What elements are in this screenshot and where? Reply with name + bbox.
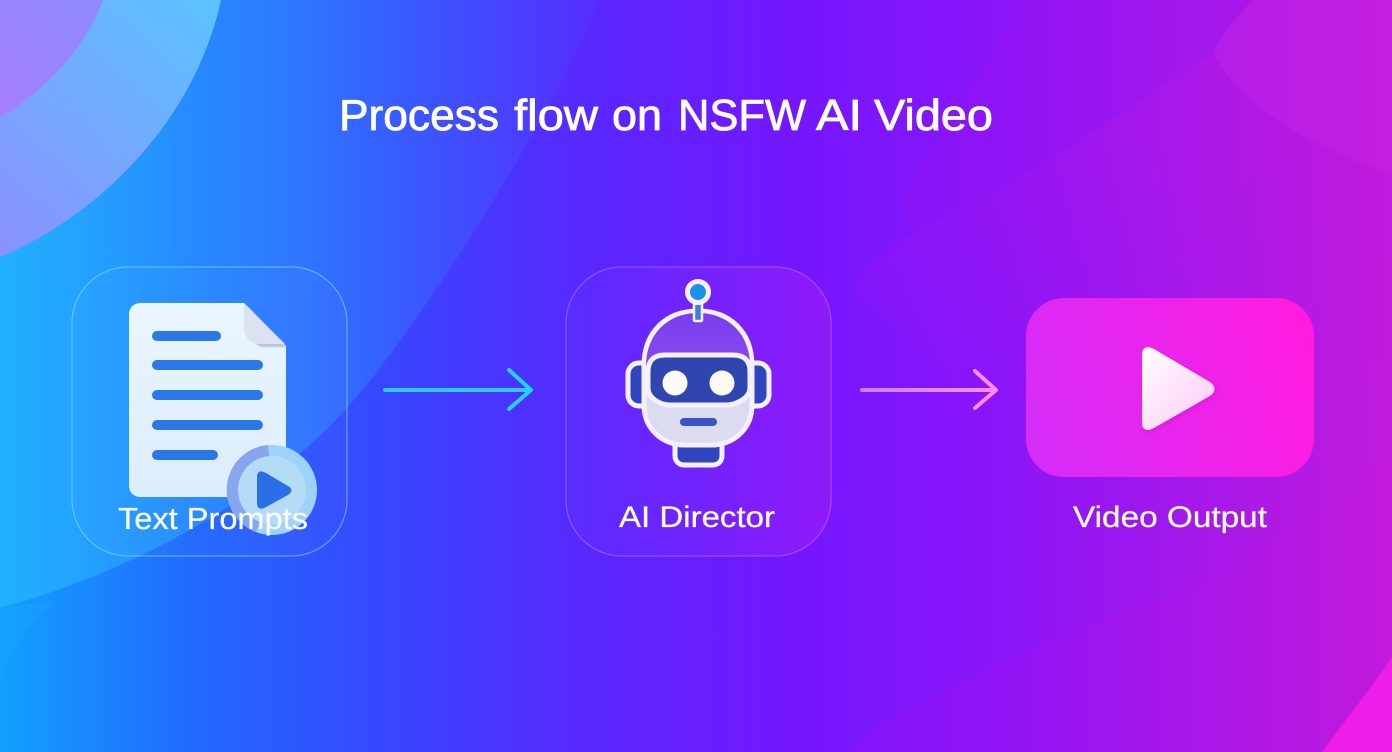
icon: play triangle — [1142, 347, 1216, 432]
title: flow — [514, 92, 599, 140]
panel: video output — [1026, 298, 1314, 534]
title: Process — [339, 92, 499, 140]
title: NSFW — [678, 92, 806, 140]
label: text prompts: Text Prompts — [118, 501, 308, 536]
title: AI — [816, 92, 862, 140]
icon: robot — [628, 282, 769, 465]
label: video output: Video Output — [1073, 501, 1268, 534]
icon: document — [129, 303, 286, 497]
icon: play badge — [227, 445, 317, 535]
arrow: prompts to director — [385, 370, 531, 409]
title: Video — [874, 92, 993, 140]
title: on — [612, 92, 662, 140]
panel: text prompts — [72, 267, 347, 556]
arrow: director to output — [862, 371, 996, 408]
label: ai director: AI Director — [619, 501, 775, 534]
panel: ai director — [566, 267, 831, 556]
